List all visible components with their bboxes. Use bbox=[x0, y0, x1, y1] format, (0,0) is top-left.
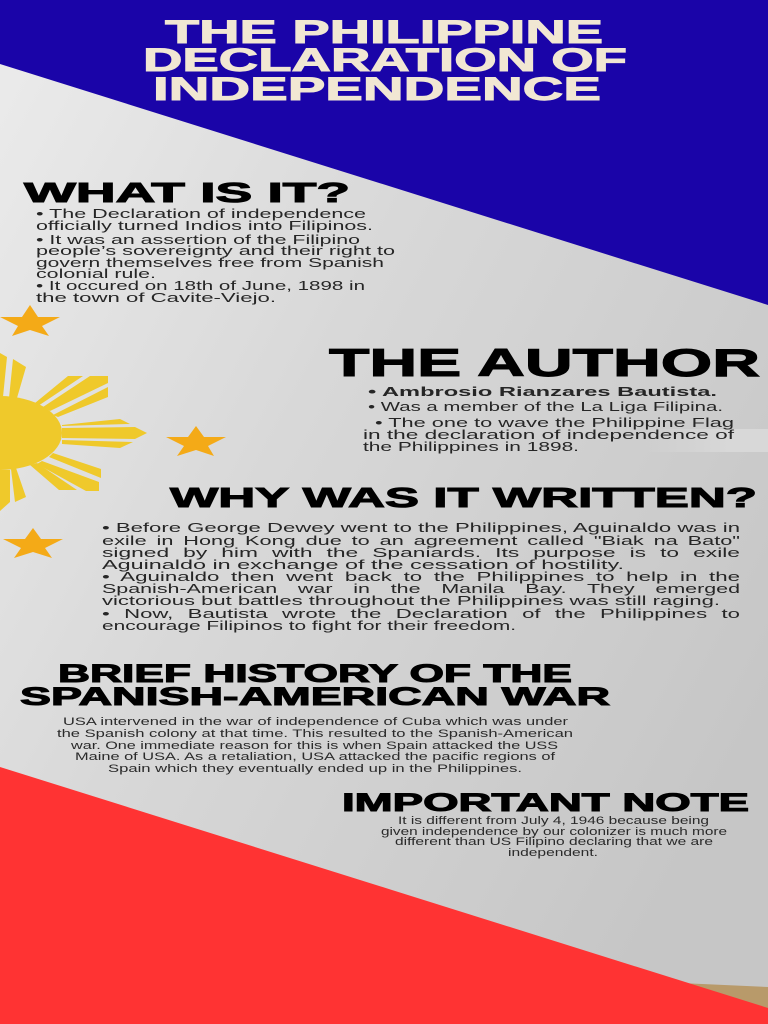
text block: why was it written: • Now, Bautista wrote the Declaration of the Philippines to bbox=[102, 606, 740, 621]
icon: star middle bbox=[166, 426, 226, 456]
title: DECLARATION OF bbox=[143, 42, 627, 78]
heading: brief history bbox=[20, 660, 610, 711]
heading: brief history: SPANISH-AMERICAN WAR bbox=[20, 683, 610, 711]
text block: what is it bbox=[36, 206, 395, 305]
text block: important note: different than US Filipino declaring that we are bbox=[395, 836, 713, 848]
text block: the author: • Ambrosio Rianzares Bautista. bbox=[368, 384, 717, 399]
heading: brief history: BRIEF HISTORY OF THE bbox=[58, 660, 572, 688]
heading: the author: THE AUTHOR bbox=[329, 342, 760, 385]
text block: the author: the Philippines in 1898. bbox=[363, 439, 579, 454]
text block: the author: • The one to wave the Philippine Flag bbox=[375, 415, 734, 430]
text block: why was it written: • Aguinaldo then went back to the Philippines to help in the bbox=[102, 569, 740, 584]
title: THE PHILIPPINE bbox=[165, 14, 603, 50]
red flag triangle bbox=[0, 767, 768, 1024]
heading: important note: IMPORTANT NOTE bbox=[342, 789, 749, 817]
text block: important note: independent. bbox=[508, 847, 598, 859]
text block: what is it: • The Declaration of independence bbox=[36, 206, 366, 221]
text block: what is it: colonial rule. bbox=[36, 266, 156, 281]
text block: brief history: USA intervened in the war of independence of Cuba which was under bbox=[63, 716, 568, 728]
text block: what is it: officially turned Indios into Filipinos. bbox=[36, 218, 373, 233]
icon: star top bbox=[0, 305, 60, 336]
text block: the author: • Was a member of the La Liga Filipina. bbox=[368, 399, 723, 414]
text block: why was it written: signed by him with the Spaniards. Its purpose is to exile bbox=[102, 545, 740, 560]
text block: important note: given independence by our colonizer is much more bbox=[381, 826, 727, 838]
text block: brief history: Maine of USA. As a retaliation, USA attacked the pacific regions of bbox=[75, 751, 556, 763]
text block: the author bbox=[363, 384, 735, 454]
text block: what is it: the town of Cavite-Viejo. bbox=[36, 290, 276, 305]
heading: what is it: WHAT IS IT? bbox=[24, 177, 350, 208]
title bbox=[143, 14, 627, 107]
text block: the author: in the declaration of independence of bbox=[363, 427, 735, 442]
light band at right edge bbox=[640, 429, 768, 452]
text block: what is it: • It occured on 18th of June, 1898 in bbox=[36, 278, 365, 293]
text block: why was it written: encourage Filipinos to fight for their freedom. bbox=[102, 618, 516, 633]
text block: brief history: war. One immediate reason for this is when Spain attacked the USS bbox=[70, 740, 558, 752]
text block: why was it written: victorious but battles throughout the Philippines was still raging. bbox=[102, 593, 720, 608]
blue flag triangle bbox=[0, 0, 768, 305]
text block: why was it written: exile in Hong Kong due to an agreement called "Biak na Bato" bbox=[102, 533, 741, 548]
text block: why was it written: Spanish-American war in the Manila Bay. They emerged bbox=[102, 581, 740, 596]
text block: brief history: Spain which they eventually ended up in the Philippines. bbox=[108, 763, 522, 775]
heading: why was it written: WHY WAS IT WRITTEN? bbox=[170, 482, 757, 513]
icon: sun with rays bbox=[0, 353, 147, 511]
text block: important note: It is different from July 4, 1946 because being bbox=[398, 815, 709, 827]
text block: important note bbox=[381, 815, 727, 859]
text block: why was it written: Aguinaldo in exchange of the cessation of hostility. bbox=[102, 557, 624, 572]
tan paper corner bbox=[680, 983, 768, 1010]
title: INDEPENDENCE bbox=[153, 71, 601, 107]
text block: brief history: the Spanish colony at that time. This resulted to the Spanish-American bbox=[57, 728, 573, 740]
text block: why was it written bbox=[102, 520, 741, 633]
text block: what is it: people’s sovereignty and their right to bbox=[36, 243, 395, 258]
text block: why was it written: • Before George Dewey went to the Philippines, Aguinaldo was in bbox=[102, 520, 740, 535]
text block: what is it: • It was an assertion of the Filipino bbox=[36, 232, 360, 247]
text block: brief history bbox=[57, 716, 573, 775]
icon: star bottom bbox=[3, 528, 63, 558]
text block: what is it: govern themselves free from Spanish bbox=[36, 255, 384, 270]
